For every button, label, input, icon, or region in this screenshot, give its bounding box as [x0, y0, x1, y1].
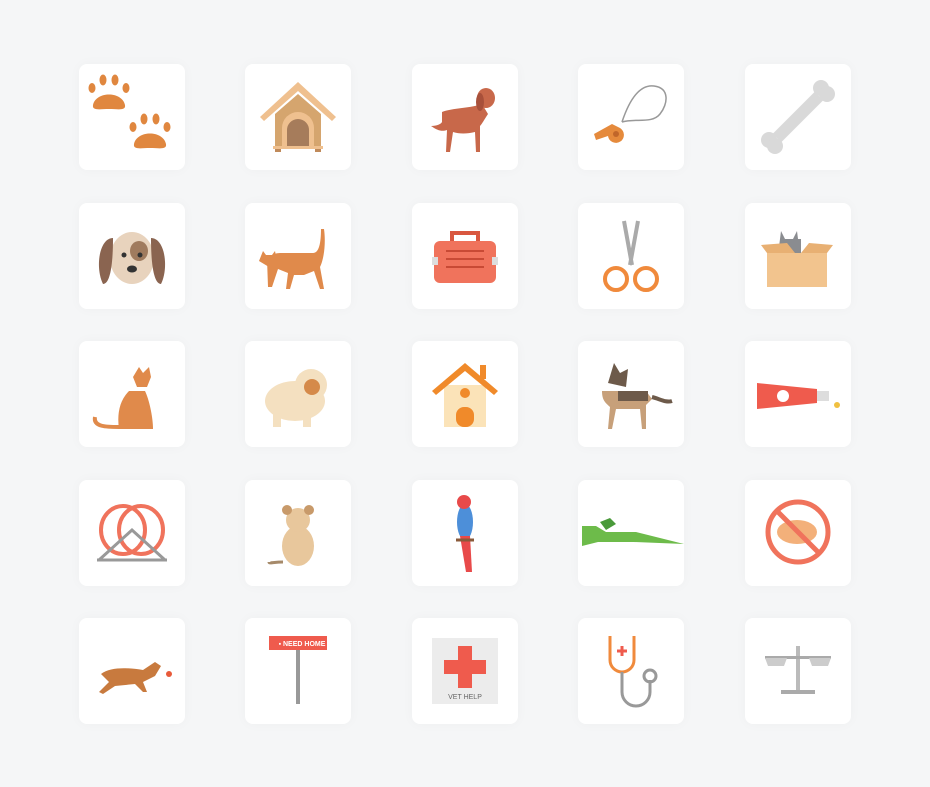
- card: dog house: [245, 64, 351, 170]
- icon: hamster wheel: [97, 506, 167, 560]
- icon: vet help: VET HELP: [448, 694, 482, 701]
- card: stethoscope: [578, 618, 684, 724]
- card: parrot: [412, 480, 518, 586]
- icon: stethoscope: [610, 636, 656, 706]
- card: scissors: [578, 203, 684, 309]
- icon: parrot: [456, 495, 474, 572]
- card: sitting cat: [79, 341, 185, 447]
- icon: pet house: [432, 363, 498, 427]
- card: running dog: [79, 618, 185, 724]
- icon: dog face: [99, 232, 165, 284]
- card: cat in box: [745, 203, 851, 309]
- card: chow chow: [245, 341, 351, 447]
- icon: walking cat: [259, 229, 325, 289]
- icon: german shepherd: [602, 363, 672, 429]
- card: scale: [745, 618, 851, 724]
- icon: running dog: [99, 662, 172, 694]
- card: need home sign: [245, 618, 351, 724]
- icon: need home sign: ▪ NEED HOME: [279, 641, 326, 648]
- card: ointment tube: [745, 341, 851, 447]
- card: dog face: [79, 203, 185, 309]
- icon: dog house: [260, 82, 336, 152]
- icon: grooming scissors: [605, 221, 657, 290]
- icon: bone: [761, 80, 835, 154]
- icon: fluffy dog: [265, 369, 327, 427]
- icon: cat in box: [761, 231, 833, 287]
- icon: pet carrier: [432, 233, 498, 283]
- icon: paw prints: [88, 74, 170, 148]
- icon: no hamster sign: [768, 502, 828, 562]
- icon: setter dog: [431, 88, 495, 152]
- card: vet help: [412, 618, 518, 724]
- card: paw prints: [79, 64, 185, 170]
- card: walking cat: [245, 203, 351, 309]
- card: gerbil: [245, 480, 351, 586]
- icon: sitting cat: [95, 367, 153, 429]
- card: dog: [412, 64, 518, 170]
- icon: iguana: [582, 518, 684, 546]
- card: pet house: [412, 341, 518, 447]
- card: iguana: [578, 480, 684, 586]
- card: shepherd: [578, 341, 684, 447]
- icon: ointment tube: [757, 383, 840, 409]
- icon: whistle: [594, 86, 666, 143]
- icon: balance scale: [765, 646, 831, 694]
- card: whistle: [578, 64, 684, 170]
- card: hamster wheel: [79, 480, 185, 586]
- icon: gerbil: [269, 505, 314, 566]
- card: no hamster: [745, 480, 851, 586]
- card: pet carrier: [412, 203, 518, 309]
- card: bone: [745, 64, 851, 170]
